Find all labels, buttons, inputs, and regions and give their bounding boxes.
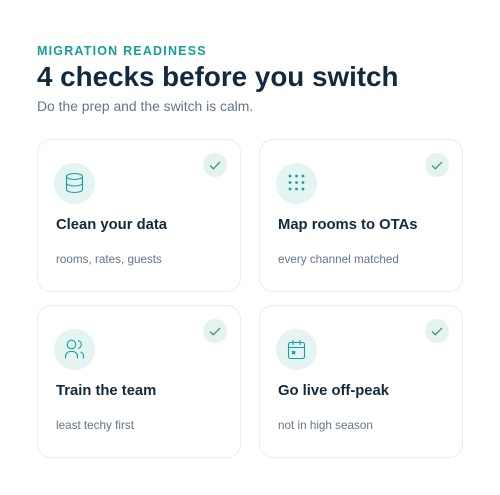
card title: Map rooms to OTAs — [278, 217, 417, 233]
subtitle: Do the prep and the switch is calm. — [37, 98, 253, 114]
title: 4 checks before you switch — [37, 60, 398, 92]
icon: grid — [276, 163, 317, 204]
card text: least techy first — [56, 418, 134, 432]
icon: database — [54, 163, 95, 204]
card text: rooms, rates, guests — [56, 252, 162, 266]
panel: clean your data — [37, 139, 241, 292]
card text: every channel matched — [278, 252, 399, 266]
panel: train the team — [37, 305, 241, 458]
card title: Clean your data — [56, 217, 167, 233]
icon: calendar — [276, 329, 317, 370]
panel: map rooms to OTAs — [259, 139, 463, 292]
icon: check badge — [203, 153, 227, 177]
card title: Train the team — [56, 383, 156, 399]
card title: Go live off-peak — [278, 383, 389, 399]
eyebrow: MIGRATION READINESS — [37, 44, 207, 58]
icon: check badge — [425, 319, 449, 343]
icon: check badge — [203, 319, 227, 343]
card text: not in high season — [278, 418, 373, 432]
icon: people — [54, 329, 95, 370]
icon: check badge — [425, 153, 449, 177]
panel: go live off-peak — [259, 305, 463, 458]
